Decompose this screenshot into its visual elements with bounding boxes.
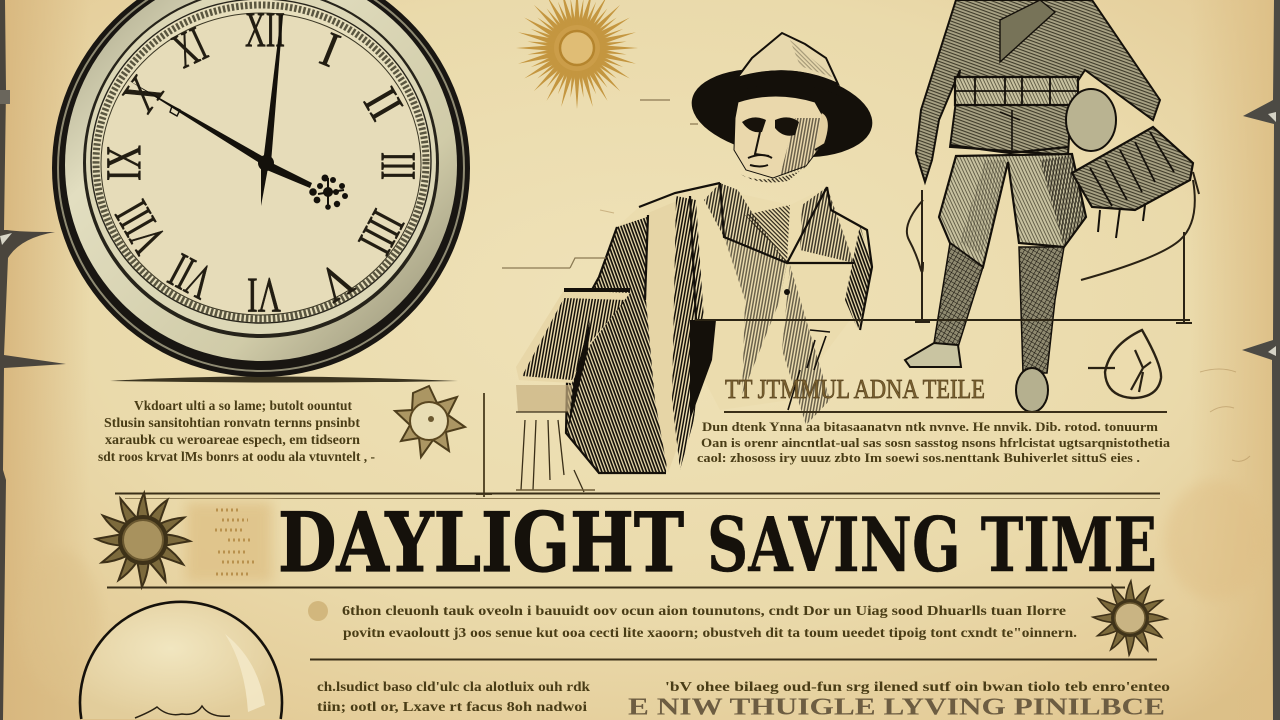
soldier rope and poles	[907, 172, 1199, 323]
lower left text block: tiin; ootl or, Lxave rt facus 8oh nadwoi	[317, 700, 587, 715]
pocket watch clock	[52, 0, 470, 382]
intro paragraph with stain icon	[308, 581, 1167, 660]
man neck and face	[734, 96, 829, 182]
intro text: povitn evaoloutt j3 oos senue kut ooa cecti lite xaoorn; obustveh dit ta toum ueedet tipoig tont cxndt te"oinnern.	[343, 626, 1077, 641]
torn right edge with thorns	[1242, 0, 1280, 720]
gold sun emblem	[494, 0, 660, 131]
rule under upper right heading	[724, 411, 1167, 413]
soldier pack and helmet	[1066, 89, 1193, 238]
teardrop figure icon	[1088, 330, 1161, 398]
lower right text: 'bV ohee bilaeg oud-fun srg ilened sutf oin bwan tiolo teb enro'enteo	[665, 680, 1170, 695]
text block: upper right: Dun dtenk Ynna aa bitasaanatvn ntk nvnve. He nnvik. Dib. rotod. tonuurm	[702, 419, 1158, 434]
clock numerals: VI	[247, 268, 281, 324]
torn left edge with thorns	[0, 0, 66, 720]
double top rule	[115, 492, 1160, 494]
clock numerals: II	[353, 78, 415, 129]
clock numerals: VIII	[103, 192, 177, 263]
text block: upper right: caol: zhososs iry uuuz zbto Im soewi sos.nenttank Buhiverlet sittuS eies .	[697, 450, 1140, 465]
man hat crown	[735, 33, 840, 96]
clock numerals: XII	[245, 1, 285, 57]
rule under intro	[310, 658, 1157, 660]
horizontal rule through figures	[695, 319, 1190, 321]
tan stained band	[186, 502, 272, 582]
clock numerals: IIII	[348, 202, 416, 263]
man body	[566, 183, 872, 473]
caption text: Vkdoart ulti a so lame; butolt oountut	[134, 398, 352, 413]
left sun emblem	[96, 493, 190, 587]
man cuff and pedestal	[516, 290, 630, 492]
caption text	[98, 398, 375, 464]
clock base shadow	[110, 376, 458, 382]
right sun emblem	[1093, 581, 1167, 655]
clock numerals: III	[371, 152, 427, 180]
title band	[96, 493, 1160, 591]
clock numerals: I	[313, 20, 347, 78]
section heading: upper right: TT JTMMUL ADNA TEILE	[725, 374, 985, 404]
light bulb globe	[80, 602, 282, 719]
rule under title	[107, 586, 1125, 588]
intro text	[342, 604, 1077, 641]
caption text: sdt roos krvat lMs bonrs at oodu ala vtuvntelt , -	[98, 449, 375, 464]
caption text: Stlusin sansitohtian ronvatn ternns pnsinbt	[104, 415, 361, 430]
vertical post	[476, 393, 492, 497]
soldier torso and arms	[916, 0, 1160, 182]
intro text: 6thon cleuonh tauk oveoln i bauuidt oov ocun aion tounutons, cndt Dor un Uiag sood Dhuarlls tuan Ilorre	[342, 604, 1066, 619]
clock bezel	[52, 0, 470, 377]
clock numerals: IX	[95, 145, 151, 181]
clock numerals: V	[310, 252, 363, 314]
soldier left leg and foot	[905, 243, 983, 367]
soldier trousers	[939, 154, 1086, 267]
man hat brim	[686, 58, 878, 168]
standing soldier illustration	[905, 0, 1199, 412]
speckle texture	[215, 510, 254, 574]
man in hat illustration	[516, 33, 878, 492]
clock numerals: XI	[164, 15, 215, 79]
clock numerals	[95, 1, 427, 324]
lower right text and heading	[628, 680, 1170, 720]
text block: upper right	[697, 419, 1171, 465]
stray sketch marks	[502, 100, 698, 268]
title band: SAVING TIME	[707, 501, 1157, 589]
clock numerals: VII	[160, 243, 221, 311]
soldier right leg and foot	[1016, 247, 1064, 412]
text block: upper right: Oan is orenr aincntlat-ual sas sosn sasstog nsons hfrlcistat ugtsarqnistothetia	[701, 435, 1171, 450]
small compass sun	[395, 386, 465, 457]
caption panel under clock	[98, 386, 492, 497]
title text: DAYLIGHT	[278, 496, 684, 591]
lower left text block: ch.lsudict baso cld'ulc cla alotluix ouh rdk	[317, 680, 590, 695]
clock numerals: X	[111, 65, 174, 122]
lower left text block	[317, 680, 590, 715]
stain icon	[308, 601, 328, 621]
lower right large heading: E NIW THUIGLE LYVING PINILBCE	[628, 694, 1165, 720]
caption text: xaraubk cu weroareae espech, em tidseorn	[105, 432, 360, 447]
clock hands	[128, 15, 348, 210]
